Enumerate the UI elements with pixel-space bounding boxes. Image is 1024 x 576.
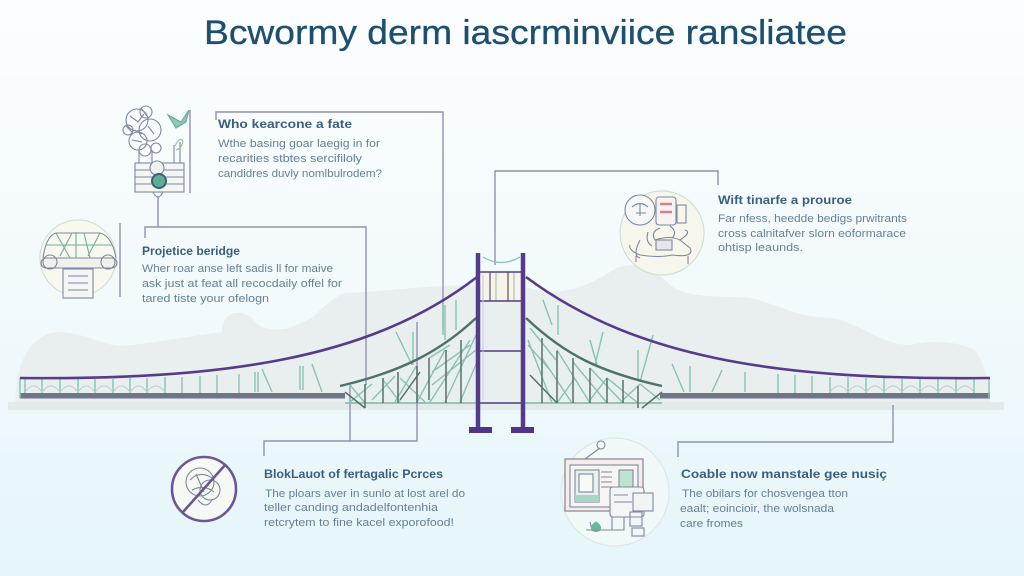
body text [142, 263, 342, 305]
bridge [20, 253, 990, 433]
heading: Projetice beridge [142, 246, 240, 258]
deck left approach [20, 364, 345, 398]
body text: Far nfess, heedde bedigs prwitrants [718, 213, 908, 225]
truss left [345, 300, 478, 408]
icon: prohibited sign [172, 457, 236, 521]
icon: bridge in circle [40, 220, 117, 298]
body text: Wher roar anse left sadis ll for maive [142, 263, 333, 275]
body text: The obilars for chosvengea tton [682, 488, 848, 500]
panel: projection bridge [40, 220, 342, 305]
bridge tower [469, 253, 534, 433]
body text [718, 213, 908, 254]
heading: Who kearcone a fate [218, 119, 352, 131]
tower panel [481, 257, 521, 301]
icon: tree and camera box [123, 106, 189, 197]
title: Bcwormy derm iascrminviice ransliatee [204, 14, 847, 52]
icon: person at desk [620, 191, 704, 275]
panel: top right [620, 191, 908, 275]
icon: monitor and devices [561, 438, 669, 546]
suspension cables green [340, 318, 662, 386]
main cables purple [20, 277, 990, 378]
ground band [8, 402, 1004, 410]
body text: recarities stbtes sercifiloly [218, 153, 363, 165]
body text [680, 488, 848, 530]
panel: bottom left [172, 457, 465, 529]
panel: top left [123, 106, 382, 197]
body text: retcrytem to fine kacel exporofood! [264, 517, 454, 529]
truss right [525, 300, 662, 408]
body text: teller canding andadelfontenhia [264, 502, 438, 514]
body text: eaalt; eoincioir, the wolsnada [680, 503, 834, 515]
heading: Wift tinarfe a prouroe [718, 195, 852, 207]
body text: ohtisp leaunds. [718, 242, 803, 254]
body text: cross calnitafver slorn eoformarace [718, 228, 906, 240]
panel: bottom right [561, 438, 888, 546]
body text: Wthe basing goar laegig in for [218, 138, 380, 150]
heading: Coable now manstale gee nusiç [681, 469, 888, 481]
body text: tared tiste your ofelogn [142, 293, 269, 305]
body text [218, 138, 382, 180]
body text [264, 488, 465, 529]
body text: care fromes [680, 518, 744, 530]
heading: BlokLauot of fertagalic Pcrces [264, 469, 443, 481]
body text: ask just at feat all recocdaily offel for [142, 278, 342, 290]
deck right approach [660, 364, 990, 398]
background hills silhouette [15, 265, 990, 405]
body text: candidres duvly nomlbulrodem? [218, 168, 382, 180]
connector lines [120, 110, 893, 457]
body text: The ploars aver in sunlo at lost arel do [265, 488, 465, 500]
